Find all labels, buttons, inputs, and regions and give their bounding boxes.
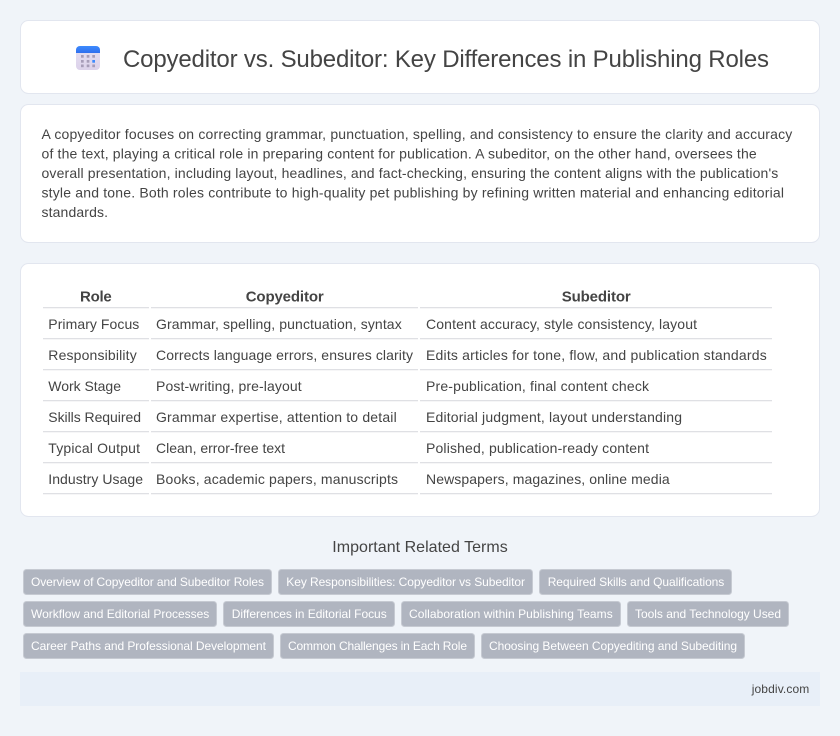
table row: Work Stage: Post-writing, pre-layout: [156, 378, 302, 394]
table row: Primary Focus: Grammar, spelling, punctuation, syntax: [156, 316, 402, 332]
tag: Workflow and Editorial Processes: Workflow and Editorial Processes: [31, 607, 209, 621]
tag: Choosing Between Copyediting and Subediting: Choosing Between Copyediting and Subediting: [489, 639, 737, 653]
table row: Responsibility: Responsibility: [48, 347, 137, 363]
tag: Career Paths and Professional Development: [24, 634, 274, 658]
table row: Typical Output: Clean, error-free text: [156, 440, 285, 456]
table row: Responsibility: Edits articles for tone, flow, and publication standards: [426, 347, 767, 363]
tag: Career Paths and Professional Development: Career Paths and Professional Development: [31, 639, 267, 653]
text block: introduction paragraph: A copyeditor focuses on correcting grammar, punctuation, spelling, and consistency to ensure the clarity and accuracy: [42, 126, 792, 142]
tag: Overview of Copyeditor and Subeditor Roles: [24, 570, 272, 594]
table row: Typical Output: Polished, publication-ready content: [426, 440, 649, 456]
table row: Responsibility: [43, 347, 772, 370]
table row: Skills Required: Grammar expertise, attention to detail: [156, 409, 397, 425]
table row: Primary Focus: Content accuracy, style consistency, layout: [426, 316, 697, 332]
table header: Subeditor: [562, 288, 631, 306]
table row: Industry Usage: Industry Usage: [48, 471, 143, 487]
panel: related terms: [24, 539, 788, 658]
tag: Required Skills and Qualifications: Required Skills and Qualifications: [548, 575, 724, 589]
tag: Workflow and Editorial Processes: [24, 602, 216, 626]
tag: Key Responsibilities: [278, 570, 532, 594]
title: Copyeditor vs. Subeditor: Key Differences in Publishing Roles: [123, 46, 769, 73]
table row: Industry Usage: Books, academic papers, manuscripts: [156, 471, 398, 487]
table row: Skills Required: [43, 409, 772, 432]
text block: introduction paragraph: standards.: [42, 204, 108, 220]
table header: Copyeditor: [246, 288, 324, 306]
table row: Typical Output: Typical Output: [48, 440, 140, 456]
table row: Work Stage: [43, 378, 772, 401]
panel: comparison table: [20, 264, 820, 516]
tag: Choosing Between Copyediting and Subediting: [482, 634, 744, 658]
icon: calendar: [76, 46, 100, 70]
panel: header: [20, 20, 820, 94]
text block: introduction paragraph: overall presentation, including layout, headlines, and fact-checking, ensuring the content aligns with the publication's: [42, 165, 778, 181]
table row: Primary Focus: [43, 316, 772, 339]
tag: Collaboration within Publishing Teams: Collaboration within Publishing Teams: [409, 607, 613, 621]
table row: Typical Output: [43, 440, 772, 463]
table row: Work Stage: Work Stage: [48, 378, 121, 394]
table row: Skills Required: Skills Required: [48, 409, 141, 425]
tag: Key Responsibilities: Key Responsibilities: Copyeditor vs Subeditor: [286, 575, 525, 589]
tag: Tools and Technology Used: [628, 602, 788, 626]
table row: Industry Usage: [43, 471, 772, 494]
tag: Common Challenges in Each Role: [280, 634, 474, 658]
text block: introduction paragraph: style and tone. Both roles contribute to high-quality pet publishing by refining written material and enhancing editorial: [42, 184, 784, 200]
text block: introduction paragraph: of the text, playing a critical role in preparing content for publication. A subeditor, on the other hand, oversees the: [42, 146, 757, 162]
table row: Primary Focus: Primary Focus: [48, 316, 139, 332]
footer: [20, 672, 820, 706]
tag: Tools and Technology Used: Tools and Technology Used: [635, 607, 781, 621]
tag: Collaboration within Publishing Teams: [402, 602, 620, 626]
tag: Overview of Copyeditor and Subeditor Roles: Overview of Copyeditor and Subeditor Roles: [31, 575, 264, 589]
table header: Role: [80, 288, 112, 306]
panel: introduction: [20, 104, 820, 242]
tag: Common Challenges in Each Role: Common Challenges in Each Role: [288, 639, 467, 653]
tag: Required Skills and Qualifications: [540, 570, 732, 594]
tag: Differences in Editorial Focus: Differences in Editorial Focus: [232, 607, 387, 621]
table row: Work Stage: Pre-publication, final content check: [426, 378, 650, 394]
tag: Differences in Editorial Focus: [224, 602, 394, 626]
text block: introduction paragraph: [42, 126, 792, 220]
table row: Industry Usage: Newspapers, magazines, online media: [426, 471, 670, 487]
table header: [43, 288, 772, 308]
table row: Skills Required: Editorial judgment, layout understanding: [426, 409, 682, 425]
footer: jobdiv.com: [751, 682, 809, 696]
table row: Responsibility: Corrects language errors, ensures clarity: [156, 347, 413, 363]
heading: Important Related Terms: Important Related Terms: [332, 539, 508, 556]
